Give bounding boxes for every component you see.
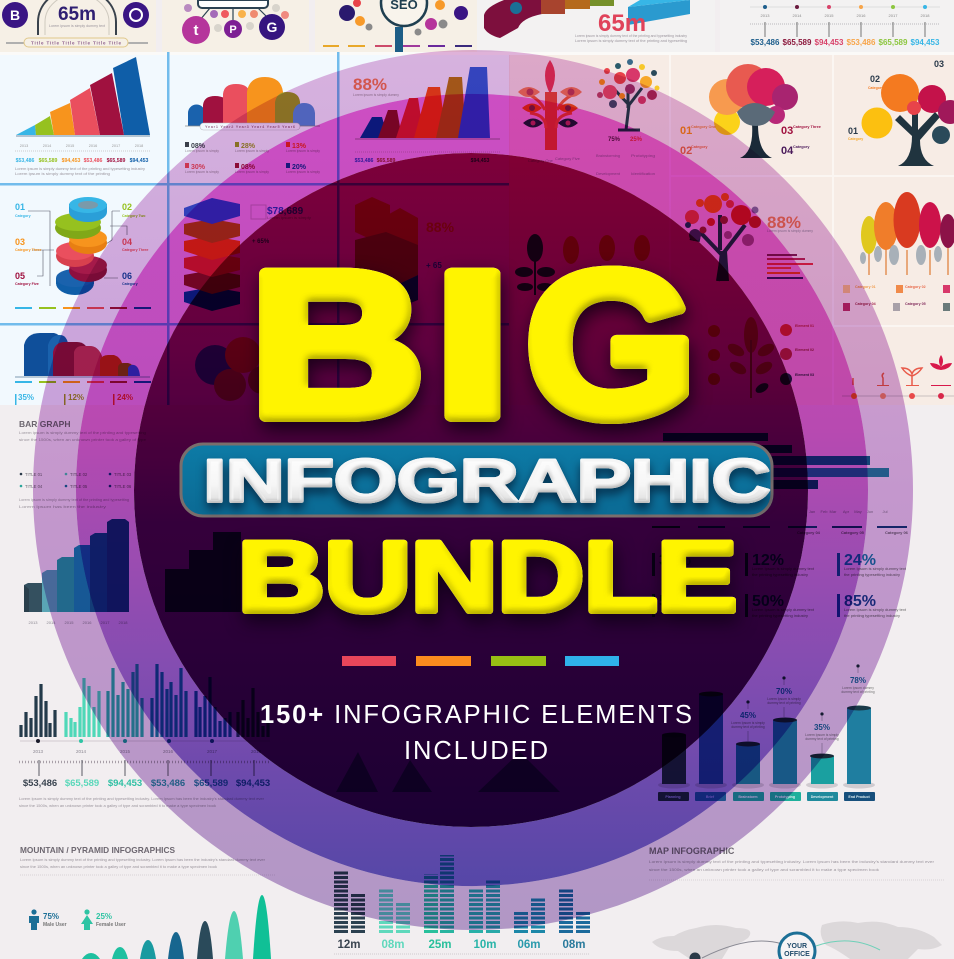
stats: percentage callouts: 50% [752, 593, 784, 610]
chart: 3D cylinders with labels: Lorem Ipsum is simply [731, 721, 765, 725]
chart: 3D ring stack with labels: 04 [122, 237, 132, 247]
chart: equalizer columns: 10m [473, 939, 497, 951]
chart: 3D cylinders with labels [658, 664, 875, 801]
icon: round foliage tree: 04 [781, 145, 794, 157]
chart: stepped 3D area: 2018 [135, 144, 143, 148]
panel: top strip of social infographics: Lorem ipsum is simply dummy text [49, 23, 106, 28]
chart: 3D ring stack with labels [15, 197, 151, 309]
chart: histogram by year: since the 1500s, when an unknown printer took a galley of type and scrambled it to make a type specimen book [19, 803, 216, 808]
chart: user share and mountain peaks: Female User [96, 922, 126, 928]
chart: 3D teal step bars: 2016 [83, 620, 92, 625]
chart: stepped 3D area: 2014 [43, 144, 51, 148]
panel: top strip of social infographics: $94,453 [911, 38, 940, 47]
chart: histogram by year: 2016 [163, 749, 174, 754]
chart: equalizer columns: 06m [517, 939, 541, 951]
chart: user share and mountain peaks [29, 895, 271, 959]
chart: horizontal timeline bars: May [854, 509, 862, 514]
subtitle [260, 701, 692, 765]
chart: 3D arches: Lorem ipsum is simply [185, 148, 219, 153]
heading: map infographic [649, 846, 945, 880]
icon: numbered circle tree [848, 59, 954, 166]
chart: histogram by year: $94,453 [108, 778, 142, 789]
title: BIG: G [526, 230, 696, 461]
chart: stepped 3D area: 2016 [89, 144, 97, 148]
icon: dotted tree: Development [596, 171, 621, 176]
heading and legend: bar graph: TITLE 02 [70, 472, 88, 477]
chart: histogram by year: 2015 [120, 749, 131, 754]
chart: 3D ring stack with labels: 01 [15, 202, 25, 212]
chart: 3D arches: 28% [241, 143, 256, 150]
chart: 3D arches: Lorem ipsum is simply [286, 169, 320, 174]
chart: 3D arches: Lorem ipsum is simply [235, 148, 269, 153]
chart: equalizer columns: 08m [381, 939, 405, 951]
chart: 3D arches: 20% [292, 164, 307, 171]
icon: dotted tree: 25% [630, 137, 643, 143]
chart: histogram by year: $65,589 [65, 778, 99, 789]
heading and legend: bar graph [19, 419, 147, 509]
chart: 3D ring stack with labels: 02 [122, 202, 132, 212]
chart: 3D cylinders with labels: 78% [850, 676, 866, 685]
chart: 3D cylinders with labels: 70% [776, 687, 792, 696]
heading and legend: bar graph: TITLE 01 [25, 472, 43, 477]
icon: leaf forest: Category 02 [905, 285, 926, 289]
chart: histogram by year: $53,486 [151, 778, 185, 789]
stats: percentage callouts: 24% [844, 552, 876, 569]
chart: 3D cylinders with labels: dummy text of printing [731, 725, 765, 729]
chart: histogram by year: $94,453 [236, 778, 270, 789]
panel: top strip of social infographics: Lorem ipsum is simply dummy text of the printing and typesetting [575, 38, 687, 43]
heading and legend: bar graph: Lorem ipsum is simply dummy text of the printing and typesetting [19, 430, 146, 435]
chart: stepped 3D area: $94,453 [62, 158, 80, 164]
chart: 3D cylinders with labels: 35% [814, 723, 830, 732]
chart: stepped 3D area: Lorem ipsum is simply dummy text of the printing and typesetting industry [15, 166, 145, 171]
heading and legend: bar graph: TITLE 05 [70, 484, 88, 489]
chart: world map with office marker: OFFICE [784, 951, 810, 958]
chart: 3D arches: 08% [191, 143, 206, 150]
chart: 3D cylinders with labels: End Product [848, 795, 870, 799]
panel: top strip of social infographics: P [229, 24, 237, 36]
chart: 3D slanted bars with 88 percent: $65,589 [377, 158, 395, 164]
panel: top strip of social infographics: 2017 [889, 13, 898, 18]
heading and legend: bar graph: TITLE 06 [114, 484, 132, 489]
banner: INFOGRAPHIC pill: INFOGRAPHIC [204, 448, 770, 515]
heading: mountain pyramid infographics [20, 845, 275, 875]
stats: percentage callouts: Lorem Ipsum is simply dummy text [752, 567, 815, 571]
icon: eye plant: Category One [528, 158, 554, 163]
chart: equalizer columns: 08m [562, 939, 586, 951]
heading: mountain pyramid infographics: Lorem Ipsum is simply dummy text of the printing and typesetting industry. Lorem Ipsum has been the industry's standard dummy text ever [20, 857, 266, 862]
panel: top strip of social infographics: t [194, 22, 198, 39]
chart: 3D ring stack with labels: 03 [15, 237, 25, 247]
heading and legend: bar graph: since the 1500s, when an unknown printer took a galley of type [19, 437, 147, 442]
chart: histogram by year [19, 664, 270, 808]
chart: 3D arches: Lorem ipsum is simply [235, 169, 269, 174]
panel: top strip of social infographics: G [267, 19, 278, 35]
chart: 3D slanted bars with 88 percent [353, 67, 500, 164]
chart: horizontal timeline bars: Jun [867, 509, 873, 514]
heading and legend: bar graph: TITLE 03 [114, 472, 132, 477]
chart: horizontal timeline bars: Mar [830, 509, 837, 514]
chart: 3D teal step bars: 2017 [101, 620, 110, 625]
icon: eye plant: Category Five [555, 156, 581, 161]
chart: 3D ring stack with labels: Category [15, 214, 31, 218]
title: BIG: B [250, 229, 425, 460]
icon: dotted tree: 75% [608, 137, 621, 143]
subtitle: 150+ INFOGRAPHIC ELEMENTS [260, 701, 692, 729]
icon: round foliage tree: Category One [691, 125, 716, 129]
panel: top strip of social infographics [0, 0, 954, 55]
chart: equalizer columns: 12m [337, 939, 361, 951]
chart: 3D teal step bars: 2015 [65, 620, 74, 625]
chart: 3D cylinders with labels: Lorem Ipsum is simply [805, 733, 839, 737]
chart: 3D cylinders with labels: dummy text of printing [805, 737, 839, 741]
panel: cream grid of tree charts [509, 55, 954, 405]
chart: 3D arches: 13% [292, 143, 307, 150]
chart: horizontal timeline bars: Category 05 [841, 530, 865, 535]
icon: leaf forest: Category 05 [905, 302, 926, 306]
colour dash divider [342, 656, 619, 666]
icon: round foliage tree: 03 [781, 125, 793, 137]
icon: round foliage tree: Category Three [793, 125, 821, 129]
chart: stacked 3D arcs row: 24% [117, 393, 133, 402]
inner dark circle [134, 153, 808, 827]
stats: percentage callouts: Lorem Ipsum is simply dummy text [844, 608, 907, 612]
icon: leaf forest: Category 04 [855, 302, 876, 306]
panel: top strip of social infographics: 2013 [761, 13, 770, 18]
chart: histogram by year: 2018 [251, 749, 262, 754]
panel: top strip of social infographics: $53,486 [847, 38, 876, 47]
stats: percentage callouts: 85% [844, 593, 876, 610]
panel: top strip of social infographics: 2016 [857, 13, 866, 18]
chart: 3D cylinders with labels: dummy text of printing [841, 690, 875, 694]
chart: stacked 3D arcs row: 35% [18, 393, 34, 402]
heading: mountain pyramid infographics: since the 1500s, when an unknown printer took a galley of type and scrambled it to make a type specimen book [20, 864, 217, 869]
icon: round foliage tree: Category [793, 145, 810, 149]
chart: stepped 3D area: 2013 [20, 144, 28, 148]
chart: 3D cylinders with labels: Brainstorm [738, 795, 758, 799]
icon: numbered circle tree: Category [868, 86, 883, 90]
chart: 3D ring stack with labels: Category Five [15, 282, 39, 286]
chart: 3D slanted bars with 88 percent: 88% [353, 75, 387, 94]
chart: 3D slanted bars with 88 percent: Lorem ipsum is simply dummy [353, 92, 399, 97]
chart: red cube stack [355, 197, 455, 308]
chart: 3D teal step bars: 2013 [29, 620, 38, 625]
chart: stepped 3D area: $65,589 [39, 158, 57, 164]
chart: horizontal timeline bars: Jul [882, 509, 888, 514]
stats: percentage callouts: the printing typesetting industry [752, 614, 808, 618]
panel: top strip of social infographics: Lorem ipsum is simply dummy text of the printing and typesetting industry [575, 33, 687, 38]
chart: stepped 3D area: $65,589 [107, 158, 125, 164]
icon: dotted tree: Prototyping [631, 153, 655, 158]
stats: percentage callouts: the printing typesetting industry [752, 573, 808, 577]
middle magenta ring [76, 94, 868, 886]
icon: dotted tree: Brainstorming [596, 153, 620, 158]
heading and legend: bar graph: BAR GRAPH [19, 419, 70, 429]
icon: round foliage tree: 02 [680, 145, 692, 157]
chart: stepped 3D area [15, 57, 150, 176]
chart: 3D ring stack with labels: 06 [122, 271, 132, 281]
chart: 3D teal step bars: 2014 [47, 620, 56, 625]
icon: dotted tree [596, 59, 660, 176]
title: BUNDLE: BUNDLE [238, 523, 737, 633]
chart: world map with office marker [652, 921, 942, 959]
chart: user share and mountain peaks: 25% [96, 912, 112, 921]
chart: user share and mountain peaks: 75% [43, 912, 59, 921]
icon: numbered circle tree: Category [848, 137, 863, 141]
chart: 3D ring stack with labels: Category [122, 282, 138, 286]
chart: world map with office marker: YOUR [787, 943, 807, 950]
heading: map infographic: since the 1500s, when an unknown printer took a galley of type and scrambled it to make a type specimen book [649, 867, 879, 872]
icon: numbered circle tree: 02 [870, 74, 880, 84]
icon: round foliage tree: 01 [680, 125, 692, 137]
panel: top strip of social infographics: $65,589 [783, 38, 812, 47]
chart: stepped 3D area: $94,453 [130, 158, 148, 164]
chart: stepped 3D area: 2017 [112, 144, 120, 148]
heading: mountain pyramid infographics: MOUNTAIN / PYRAMID INFOGRAPHICS [20, 845, 175, 855]
chart: equalizer columns: 25m [428, 939, 452, 951]
chart: 3D arches: Lorem ipsum is simply [286, 148, 320, 153]
panel: top strip of social infographics: 65m [598, 10, 646, 37]
chart: 3D cylinders with labels: Brief [706, 795, 715, 799]
icon: eye plant [518, 60, 582, 163]
heading: map infographic: Lorem Ipsum is simply dummy text of the printing and typesetting industry. Lorem Ipsum has been the industry's standard dummy text ever [649, 859, 935, 864]
stats: percentage callouts: 35% [659, 552, 691, 569]
chart: 3D teal step bars [24, 519, 241, 625]
stats: percentage callouts [652, 552, 907, 618]
chart: stepped 3D area: $53,486 [16, 158, 34, 164]
chart: histogram by year: $53,486 [23, 778, 57, 789]
icon: dark leaf plants behind circle: Element 02 [795, 348, 814, 352]
chart: horizontal timeline bars: Category 06 [885, 530, 909, 535]
chart: histogram by year: $65,589 [194, 778, 228, 789]
chart: histogram by year: 2014 [76, 749, 87, 754]
chart: stepped 3D area: $53,486 [84, 158, 102, 164]
heading and legend: bar graph: TITLE 04 [25, 484, 43, 489]
icon: dark leaf plants behind circle: Element 01 [795, 324, 814, 328]
stats: percentage callouts: 12% [752, 552, 784, 569]
chart: 3D arches: Lorem ipsum is simply [185, 169, 219, 174]
stats: percentage callouts: Lorem Ipsum is simply dummy text [844, 567, 907, 571]
icon: numbered circle tree: 03 [934, 59, 944, 69]
chart: 3D ring stack with labels: Category Three [15, 248, 41, 252]
chart: red cube stack: 88% [426, 219, 455, 235]
icon: leaf forest: Category 01 [855, 285, 876, 289]
icon: 88 percent tree with bars: 88% [767, 213, 801, 232]
chart: 3D ring stack with labels: Category Two [122, 214, 146, 218]
chart: stepped 3D area: Lorem ipsum is simply dummy text of the printing [15, 171, 110, 176]
heading and legend: bar graph: Lorem ipsum is simply dummy text of the printing and typesetting [19, 497, 129, 502]
chart: histogram by year: 2013 [33, 749, 44, 754]
chart: 3D ring stack with labels: 05 [15, 271, 25, 281]
icon: round foliage tree [680, 64, 821, 158]
chart: 3D slanted bars with 88 percent: $53,486 [355, 158, 373, 164]
chart: isometric block stack: $78,689 [267, 206, 304, 217]
dark mountains behind circle [336, 752, 560, 792]
chart: isometric block stack: Lorem ipsum is simply [267, 215, 311, 220]
chart: histogram by year: Lorem Ipsum is simply dummy text of the printing and typesetting industry. Lorem Ipsum has been the industry's standard dummy text ever [19, 796, 265, 801]
chart: 3D arches [185, 77, 320, 174]
chart: 3D arches: Year1 Year2 Year3 Year4 Year5 Year6 [205, 125, 295, 129]
panel: top strip of social infographics: B [10, 7, 20, 23]
chart: isometric block stack [184, 198, 311, 311]
stats: percentage callouts: the printing typesetting industry [844, 614, 900, 618]
chart: isometric block stack: + 65% [252, 239, 270, 245]
chart: user share and mountain peaks: Male User [43, 922, 67, 928]
chart: horizontal timeline bars: Jan [809, 509, 815, 514]
heading and legend: bar graph: Lorem Ipsum has been the industry [19, 504, 106, 509]
panel: top strip of social infographics: 2018 [921, 13, 930, 18]
chart: 3D ring stack with labels: Category Three [122, 248, 148, 252]
chart: horizontal timeline bars [652, 433, 909, 535]
heading: map infographic: MAP INFOGRAPHIC [649, 846, 735, 856]
chart: 3D arches: 30% [191, 164, 206, 171]
chart: horizontal timeline bars: Feb [821, 509, 828, 514]
stats: percentage callouts: Lorem Ipsum is simply dummy text [752, 608, 815, 612]
icon: dark leaf plants behind circle: Element 03 [795, 373, 814, 377]
chart: histogram by year: 2017 [207, 749, 218, 754]
chart: 3D slanted bars with 88 percent: $94,453 [471, 158, 489, 164]
title: BIG: I [434, 228, 511, 460]
subtitle: INCLUDED [404, 737, 548, 765]
chart: 3D cylinders with labels: Prototyping [775, 795, 795, 799]
chart: 3D cylinders with labels: Planning [665, 795, 681, 799]
chart: horizontal timeline bars: Category 04 [797, 530, 821, 535]
icon: leaf forest [843, 192, 954, 311]
chart: 3D cylinders with labels: Development [811, 795, 834, 799]
icon: round foliage tree: Category [691, 145, 708, 149]
panel: blue grid of 3D charts [0, 52, 510, 405]
chart: stepped 3D area: 2015 [66, 144, 74, 148]
chart: 3D cylinders with labels: 45% [740, 711, 756, 720]
title: BIG [250, 228, 696, 461]
chart: stacked 3D arcs row: 12% [68, 393, 84, 402]
chart: 3D cylinders with labels: Lorem Ipsum dummy [842, 686, 874, 690]
chart: stacked 3D arcs row [15, 333, 151, 405]
panel: top strip of social infographics: Title Title Title Title Title Title [31, 40, 121, 46]
icon: numbered circle tree: 01 [848, 126, 858, 136]
chart: gears [195, 337, 276, 401]
panel: top strip of social infographics: 2015 [825, 13, 834, 18]
stats: percentage callouts: the printing typesetting industry [844, 573, 900, 577]
panel: top strip of social infographics: 2014 [793, 13, 802, 18]
chart: horizontal timeline bars: Apr [843, 509, 850, 514]
chart: 3D cylinders with labels: Lorem Ipsum is simply [767, 697, 801, 701]
icon: growing sprouts timeline [842, 355, 954, 399]
icon: dotted tree: Identification [631, 171, 655, 176]
chart: red cube stack: + 65 [426, 261, 442, 270]
panel: top strip of social infographics: 65m [58, 4, 96, 25]
chart: 3D arches: 08% [241, 164, 256, 171]
icon: 88 percent tree with bars: Lorem ipsum is simply dummy [767, 228, 813, 233]
chart: equalizer columns [334, 855, 590, 954]
icon: dark leaf plants behind circle [515, 234, 814, 398]
stats: percentage callouts: 50% [659, 593, 691, 610]
chart: 3D teal step bars: 2018 [119, 620, 128, 625]
chart: 3D cylinders with labels: dummy text of printing [767, 701, 801, 705]
icon: 88 percent tree with bars [685, 193, 813, 281]
panel: top strip of social infographics: $94,453 [815, 38, 844, 47]
panel: top strip of social infographics: $53,486 [751, 38, 780, 47]
panel: top strip of social infographics: $65,589 [879, 38, 908, 47]
